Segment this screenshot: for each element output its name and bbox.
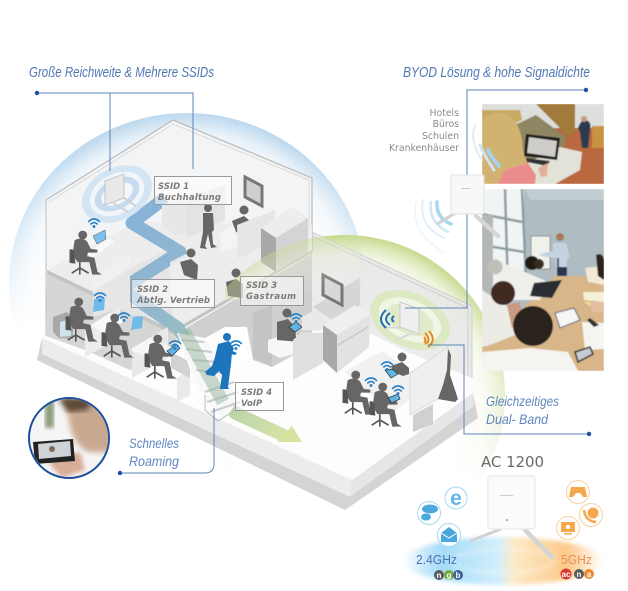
connector: BYOD	[405, 88, 588, 308]
product title: AC 1200	[481, 453, 544, 471]
isometric office building	[37, 120, 478, 510]
caption: dual band: Dual- Band	[486, 411, 549, 427]
icon: phone globe	[580, 504, 602, 526]
ceiling access point	[437, 175, 498, 236]
right upper panel	[237, 210, 276, 259]
AC 1200 product panel	[403, 453, 603, 585]
access point with rings: left	[72, 154, 162, 234]
lower floor cubicles	[85, 298, 190, 402]
upper floor desks and panels	[53, 185, 240, 339]
upper floor walls	[46, 120, 312, 336]
icon: web: e	[450, 487, 462, 510]
venue list: Hotels	[430, 108, 459, 119]
SSID 1 label: SSID 1	[158, 182, 189, 192]
icon: game controller	[566, 480, 590, 504]
label: 5GHz: 5GHz	[561, 552, 592, 567]
SSID 1 label	[154, 176, 232, 204]
connector: dual band	[428, 345, 591, 436]
band signal icon: blue	[381, 310, 394, 328]
photo: meeting room	[482, 189, 604, 371]
venue list: Büros	[433, 119, 459, 130]
connector: range heading	[35, 91, 193, 171]
data route arrow	[122, 198, 302, 442]
cabinet upper	[261, 207, 308, 272]
access point with rings: dual band	[361, 278, 459, 362]
green coverage over building	[225, 235, 360, 300]
label: 2.4GHz: 2.4GHz	[416, 552, 457, 567]
heading: BYOD: BYOD Lösung & hohe Signaldichte	[403, 65, 590, 81]
tablets	[93, 230, 400, 403]
icon: chat	[418, 502, 440, 524]
band signal icon: orange	[424, 331, 433, 347]
connector: roaming	[118, 408, 214, 475]
coverage dome: blue	[9, 113, 358, 304]
SSID 2 label: SSID 2	[137, 285, 168, 295]
SSID 2 label	[132, 280, 214, 308]
caption: roaming: Roaming	[129, 453, 179, 469]
icon: screen	[556, 516, 580, 540]
base slab	[37, 270, 478, 510]
SSID 4 label: VoIP	[241, 399, 263, 409]
band glow	[403, 537, 603, 585]
badges: n g b: b	[456, 571, 461, 580]
photo: classroom	[482, 104, 604, 184]
badges: n g b: g	[447, 571, 452, 580]
badges: ac n a	[560, 568, 594, 580]
badges: n g b: n	[437, 571, 442, 580]
SSID 4 label	[236, 382, 284, 410]
router	[470, 476, 552, 557]
lower floor back walls	[46, 250, 312, 372]
SSID 1 label: Buchhaltung	[158, 193, 221, 203]
wireless waves around ceiling AP	[415, 125, 499, 252]
badges: ac n a: a	[587, 570, 592, 579]
caption: roaming: Schnelles	[129, 435, 179, 451]
badges: n g b	[434, 570, 463, 580]
upper floor busts and standing person	[180, 204, 250, 298]
SSID 3 label	[240, 276, 304, 306]
cabinet lower	[323, 305, 370, 373]
picture frame upper	[245, 177, 262, 206]
picture frame and back panel	[313, 275, 360, 322]
SSID 3 label: SSID 3	[246, 281, 277, 291]
meeting table and partition	[344, 347, 458, 432]
staircase	[177, 331, 240, 421]
middle cubicle	[268, 306, 335, 380]
heading: range and SSIDs: Große Reichweite & Mehrere SSIDs	[29, 65, 214, 81]
SSID 2 label: Abtlg. Vertrieb	[136, 296, 210, 306]
icon: web	[445, 487, 467, 510]
badges: ac n a: n	[577, 570, 582, 579]
blue walking person	[205, 333, 237, 389]
SSID 3 label: Gastraum	[246, 292, 296, 302]
right wing wall	[312, 232, 472, 378]
badges: ac n a: ac	[562, 570, 571, 579]
SSID 4 label: SSID 4	[241, 388, 272, 398]
roaming video call circle	[29, 398, 112, 478]
seated office workers	[66, 231, 402, 427]
venue list: Krankenhäuser	[389, 143, 459, 154]
caption: dual band: Gleichzeitiges	[486, 393, 559, 409]
wifi icons	[88, 219, 404, 395]
coverage dome: green	[257, 235, 505, 465]
icon: mail	[438, 524, 460, 546]
venue list: Schulen	[422, 131, 459, 142]
